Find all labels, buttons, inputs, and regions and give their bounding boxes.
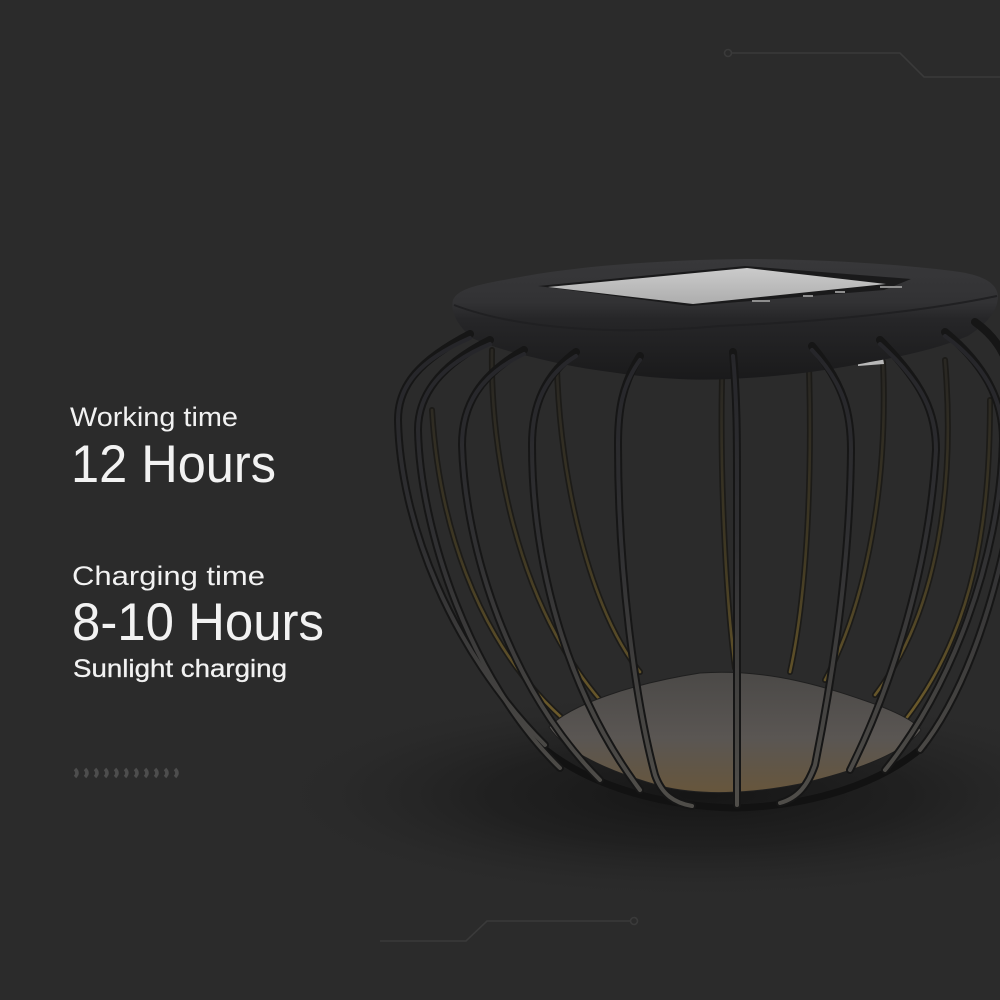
front ribs	[398, 322, 1000, 806]
lower ring	[540, 745, 925, 808]
product: solar lantern	[270, 259, 1000, 900]
back ribs	[432, 350, 990, 725]
value: 8-10 hours: 8-10 Hours	[72, 593, 324, 652]
note: sunlight charging: Sunlight charging	[73, 655, 287, 683]
text block: working time	[70, 402, 276, 494]
button strip	[752, 286, 902, 302]
icon: chevron row	[75, 769, 177, 777]
text block: charging time	[72, 561, 324, 683]
solar panel frame	[538, 266, 911, 306]
base plate	[549, 672, 921, 793]
small white tab	[858, 358, 884, 366]
top disc	[452, 259, 998, 380]
lantern shadow	[270, 690, 1000, 900]
label: working time: Working time	[70, 402, 238, 432]
rim highlight	[454, 296, 997, 330]
circuit line: bottom	[380, 918, 638, 941]
label: charging time: Charging time	[72, 561, 265, 591]
value: 12 hours: 12 Hours	[71, 435, 276, 494]
solar panel	[548, 268, 886, 304]
circuit line: top right	[724, 50, 1000, 77]
